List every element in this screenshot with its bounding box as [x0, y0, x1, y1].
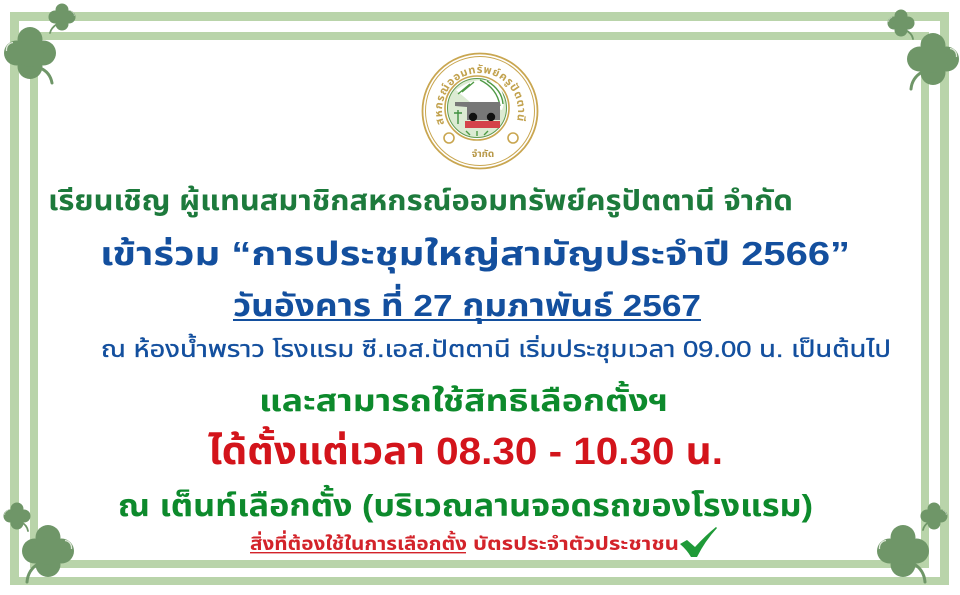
meeting date: วันอังคาร ที่ 27 กุมภาพันธ์ 2567 — [233, 283, 701, 324]
voting location: ณ เต็นท์เลือกตั้ง (บริเวณลานจอดรถของโรงแรม) — [118, 484, 813, 523]
icon: clover top-left large — [4, 27, 56, 83]
logo: cooperative seal — [422, 52, 538, 170]
required items note: สิ่งที่ต้องใช้ในการเลือกตั้ง — [250, 530, 467, 555]
icon: clover bottom-left small — [3, 502, 31, 531]
required items note: บัตรประจำตัวประชาชน — [473, 534, 679, 555]
meeting title: เข้าร่วม “การประชุมใหญ่สามัญประจำปี 2566” — [100, 235, 850, 274]
icon: clover top-right large — [907, 33, 959, 89]
voting rights line: และสามารถใช้สิทธิเลือกตั้งฯ — [259, 380, 668, 418]
venue and time: ณ ห้องน้ำพราว โรงแรม ซี.เอส.ปัตตานี เริ่มประชุมเวลา 09.00 น. เป็นต้นไป — [101, 333, 891, 363]
icon: clover bottom-right small — [920, 502, 948, 530]
logo: cooperative seal: สหกรณ์ออมทรัพย์ครูปัตตานี — [436, 64, 526, 125]
invitation heading: เรียนเชิญ ผู้แทนสมาชิกสหกรณ์ออมทรัพย์ครูปัตตานี จำกัด — [48, 185, 793, 218]
icon: clover top-right small — [887, 9, 915, 39]
voting time: ได้ตั้งแต่เวลา 08.30 - 10.30 น. — [208, 425, 723, 473]
icon: clover bottom-right large — [877, 525, 929, 582]
required items note — [250, 530, 679, 555]
icon: green check mark — [680, 527, 717, 557]
logo: cooperative seal: จำกัด — [472, 148, 494, 160]
icon: clover bottom-left large — [22, 525, 74, 582]
icon: clover top-left small — [48, 3, 76, 33]
